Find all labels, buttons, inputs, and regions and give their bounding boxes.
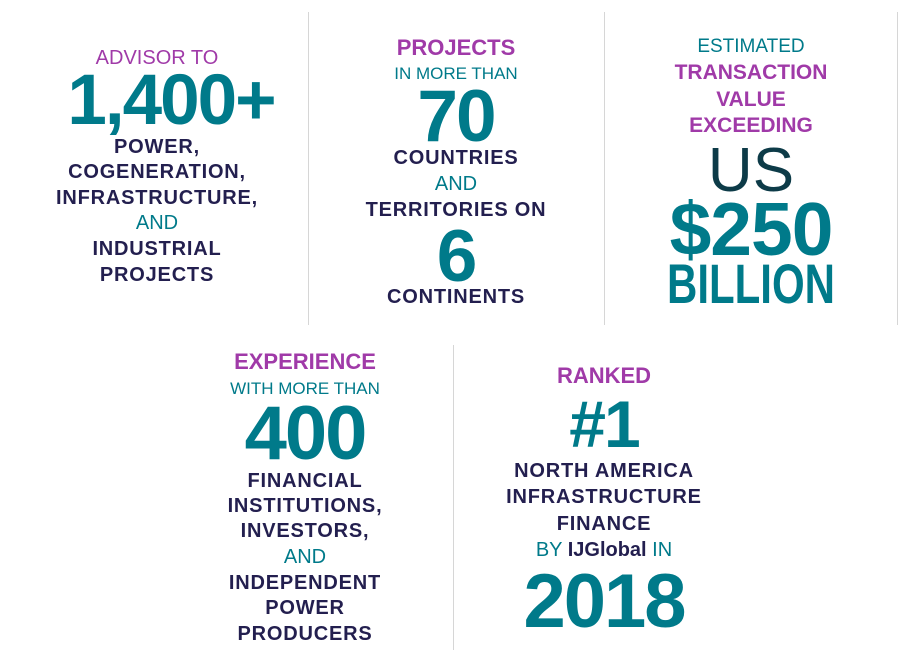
panel: experience [228,349,382,645]
number: 70: 70 [417,76,495,157]
heading: transaction value exceeding: EXCEEDING [689,114,813,137]
text: north america infrastructure finance [506,460,702,535]
panel: advisor [56,47,275,286]
number: $250: $250 [670,187,832,271]
number: 6: 6 [437,216,475,297]
heading: ranked: RANKED [557,363,651,388]
heading: transaction value exceeding: TRANSACTION [675,61,827,84]
subheading: with more than: WITH MORE THAN [230,379,380,398]
text: project types: INDUSTRIAL [92,238,222,260]
panel: ranked [506,363,702,644]
text: project types: POWER, [114,136,200,158]
text: project types: PROJECTS [100,264,214,286]
text: institutions list: INDEPENDENT [229,572,381,594]
heading: estimated: ESTIMATED [697,36,805,57]
text: by IJGlobal in: BY IJGlobal IN [536,539,672,561]
text: institutions list [228,470,382,645]
number: #1: #1 [569,387,639,461]
heading: transaction value exceeding [674,61,827,137]
text: territories on: TERRITORIES ON [366,199,546,221]
text: institutions list: AND [284,546,326,568]
text: institutions list: INSTITUTIONS, [228,495,382,517]
number: 400: 400 [245,391,365,476]
text: project types: AND [136,212,178,234]
heading: transaction value exceeding: VALUE [716,88,786,111]
text: institutions list: POWER [265,597,345,619]
text: continents: CONTINENTS [387,286,525,308]
text: north america infrastructure finance: NORTH AMERICA [514,460,694,482]
number: 1,400+: 1,400+ [67,61,275,140]
heading: advisor to: ADVISOR TO [96,47,218,69]
text: project types: COGENERATION, [68,161,246,183]
text: and: AND [435,173,477,195]
text: countries: COUNTRIES [394,147,518,169]
text: project types [56,136,258,286]
text: institutions list: FINANCIAL [248,470,362,492]
panel: transaction value [667,36,835,315]
text: institutions list: PRODUCERS [238,623,372,645]
text: north america infrastructure finance: FINANCE [557,513,651,535]
text: institutions list: INVESTORS, [241,520,369,542]
text: project types: INFRASTRUCTURE, [56,187,258,209]
heading: experience: EXPERIENCE [234,349,376,374]
number: 2018: 2018 [523,559,685,644]
heading: projects: PROJECTS [397,35,515,60]
text: US: US [708,136,794,205]
text: north america infrastructure finance: INFRASTRUCTURE [506,486,702,508]
text: billion: BILLION [667,252,835,315]
panel: projects [366,35,546,308]
subheading: in more than: IN MORE THAN [394,64,518,83]
